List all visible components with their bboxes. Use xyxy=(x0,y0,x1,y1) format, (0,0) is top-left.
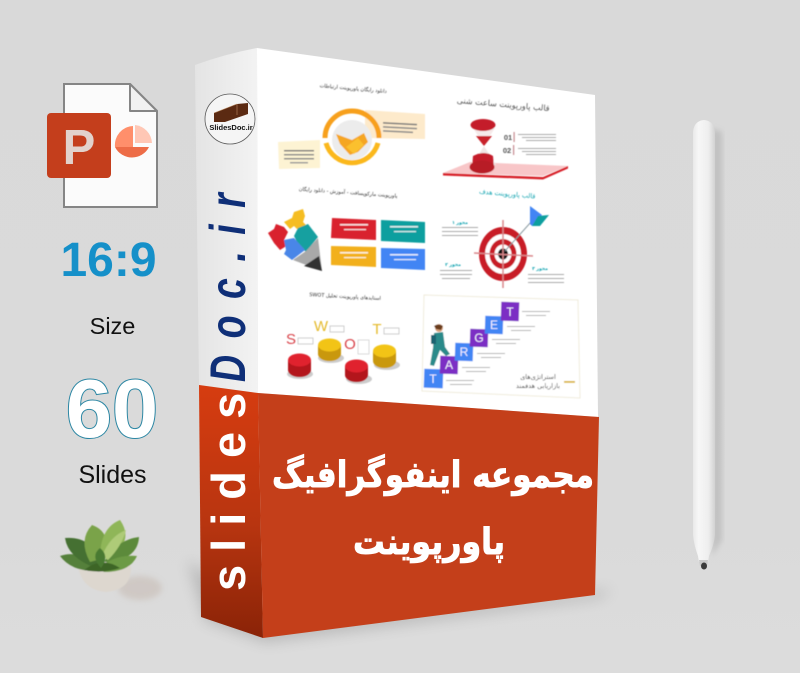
box side face: white xyxy=(195,48,258,393)
mini slide: hourglass: 02 xyxy=(503,146,511,155)
icon: PowerPoint file xyxy=(47,84,157,207)
aspect ratio value: 16:9 xyxy=(60,234,157,287)
product box xyxy=(195,48,599,638)
mini slide: target xyxy=(440,188,564,288)
mini slide: target: محور ۲ xyxy=(445,262,461,268)
mini slide: handshake xyxy=(278,82,425,169)
mini slide: hourglass: 01 xyxy=(504,133,512,142)
icon: PowerPoint file: P xyxy=(63,121,95,175)
mini slide: TARGET stairs: استراتژی‌های xyxy=(520,373,556,381)
mini slide: puzzle and color cards xyxy=(268,186,425,271)
box side face: red xyxy=(199,385,263,638)
slides label: Slides xyxy=(78,461,147,489)
spine text: Slides: slides xyxy=(202,380,255,591)
mini slide: TARGET stairs: R xyxy=(460,345,469,359)
person climbing xyxy=(430,324,450,366)
mini slide: SWOT xyxy=(286,292,400,384)
mini slide: TARGET stairs: T xyxy=(506,305,514,319)
box title line 2: پاورپوینت xyxy=(353,522,505,563)
icon: potted plant xyxy=(60,520,162,600)
mini slide: TARGET stairs: بازاریابی هدفمند xyxy=(516,382,560,390)
mini slide: SWOT: T xyxy=(372,321,382,338)
mini slide: hourglass xyxy=(443,96,568,180)
box front face: red xyxy=(258,393,599,638)
mini slide: target: محور ۳ xyxy=(532,266,548,272)
mini slide: TARGET stairs: A xyxy=(445,358,453,372)
mini slide: puzzle and color cards: پاورپوینت مارکوپسافت - آموزش - دانلود رایگان xyxy=(299,186,398,199)
mini slide: SWOT: O xyxy=(344,336,356,353)
mini slide: handshake: دانلود رایگان پاورپوینت ارتباطات xyxy=(319,82,387,95)
size label: Size xyxy=(90,313,135,339)
slide count value: 60 xyxy=(66,362,158,455)
logo: SlidesDoc.ir xyxy=(205,94,255,144)
pen xyxy=(693,120,722,570)
mini slide: TARGET stairs xyxy=(422,295,580,398)
mini slide: hourglass: قالب پاورپوینت ساعت شنی xyxy=(457,96,550,113)
mini slide: SWOT: W xyxy=(314,318,329,335)
mini slide: TARGET stairs: E xyxy=(490,318,498,332)
spine text: Doc.ir: Doc.ir xyxy=(201,177,256,382)
box title line 1: مجموعه اینفوگرافیگ xyxy=(272,454,594,496)
mini slide: SWOT: استایدهای پاورپوینت تحلیل SWOT xyxy=(309,292,381,302)
box front face: white xyxy=(257,48,598,417)
mini slide: target: محور ۱ xyxy=(452,221,468,226)
mini slide: TARGET stairs: G xyxy=(474,331,484,345)
box shadow xyxy=(188,560,612,642)
mini slide: SWOT: S xyxy=(286,331,296,348)
logo: SlidesDoc.ir: SlidesDoc.ir xyxy=(209,123,253,132)
mini slide: target: قالب پاورپوینت هدف xyxy=(479,188,536,200)
mini slide: TARGET stairs: T xyxy=(429,372,437,386)
